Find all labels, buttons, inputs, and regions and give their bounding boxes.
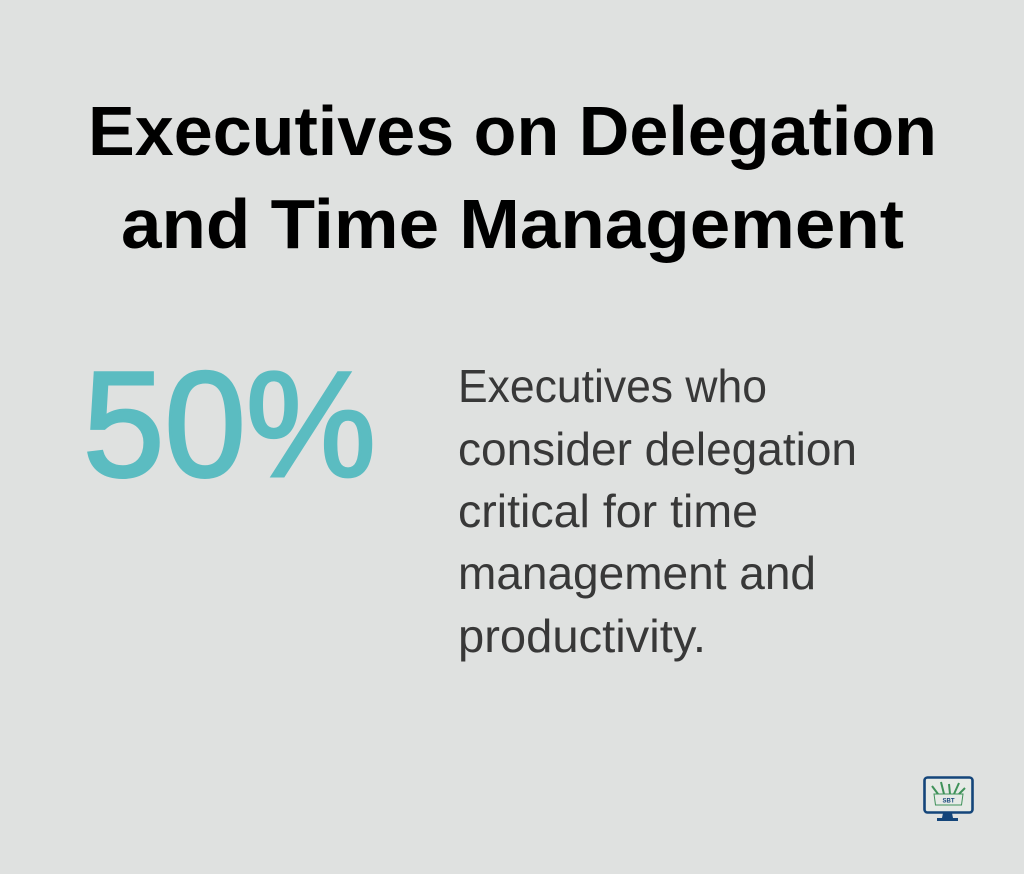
- description text: consider delegation: [458, 423, 857, 475]
- description text: management and: [458, 547, 816, 599]
- description text: critical for time: [458, 485, 758, 537]
- title: [88, 92, 937, 263]
- big statistic: 50%: 50%: [83, 340, 376, 508]
- description text: [458, 360, 857, 662]
- title: Executives on Delegation: [88, 92, 937, 170]
- icon: SBT computer monitor logo: [924, 778, 972, 821]
- description text: productivity.: [458, 610, 706, 662]
- description text: Executives who: [458, 360, 767, 412]
- icon: SBT computer monitor logo: SBT: [942, 798, 955, 804]
- title: and Time Management: [121, 185, 904, 263]
